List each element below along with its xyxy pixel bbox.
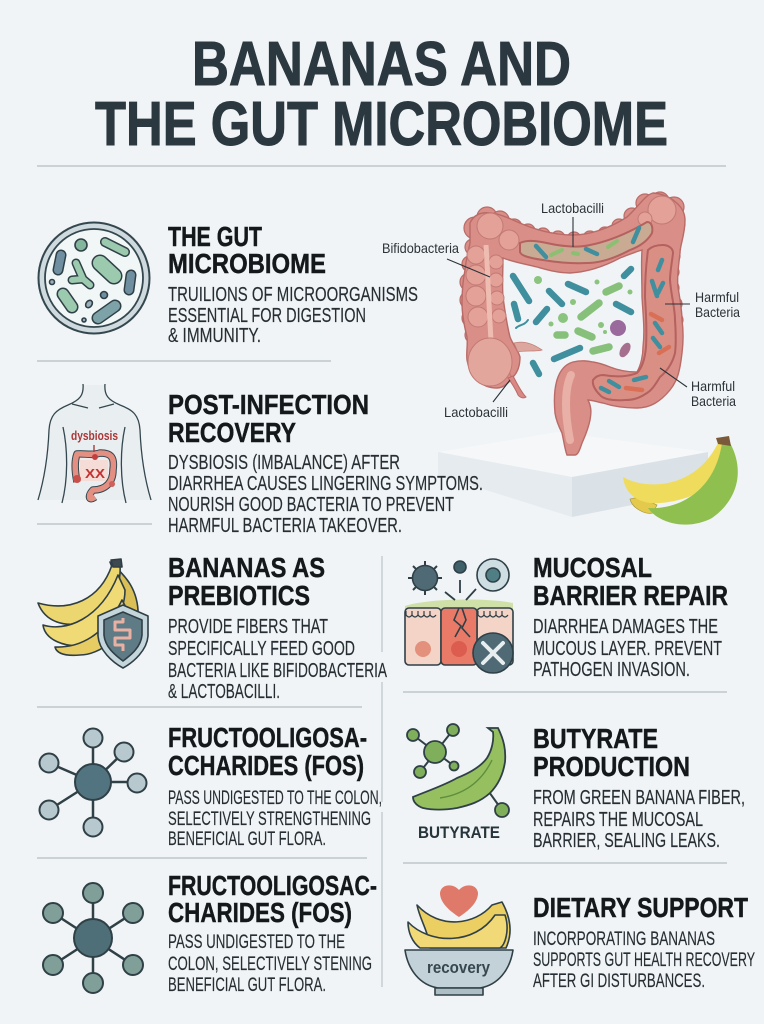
icon: green banana and molecule bbox=[407, 724, 509, 842]
inner haustra segments bbox=[466, 196, 676, 327]
text block: BENEFICIAL GUT FLORA. bbox=[168, 828, 326, 850]
panel: butyrate production bbox=[407, 723, 745, 852]
transverse lumen bbox=[520, 222, 652, 263]
icon: damaged mucosa with wrench bbox=[405, 559, 513, 673]
pedestal bbox=[438, 432, 708, 517]
icon: molecule bbox=[40, 728, 146, 836]
text block: BACTERIA LIKE BIFIDOBACTERIA bbox=[168, 660, 387, 682]
text block: ESSENTIAL FOR DIGESTION bbox=[168, 305, 366, 327]
text block: NOURISH GOOD BACTERIA TO PREVENT bbox=[168, 494, 454, 516]
callout labels: Harmful bbox=[691, 378, 735, 394]
heading bbox=[168, 221, 326, 279]
rectum shading bbox=[566, 375, 571, 440]
panel: bananas as prebiotics bbox=[38, 552, 387, 703]
icon: torso with dysbiosis: dysbiosis bbox=[71, 428, 118, 443]
text block bbox=[533, 928, 755, 992]
text block bbox=[533, 787, 745, 852]
text block: SPECIFICALLY FEED GOOD bbox=[168, 638, 355, 660]
heading: BANANAS AS bbox=[168, 552, 325, 583]
heading bbox=[533, 723, 690, 782]
callout labels bbox=[382, 200, 740, 420]
panel: dietary support bbox=[405, 885, 755, 995]
icon: molecule bbox=[43, 883, 143, 993]
icon: bowl of bananas with heart bbox=[405, 885, 513, 995]
bananas yellow and green bbox=[623, 436, 738, 525]
icon: banana bunch with shield bbox=[38, 559, 148, 668]
heading: MUCOSAL bbox=[533, 552, 652, 583]
icon: torso with dysbiosis bbox=[38, 384, 151, 503]
heading bbox=[168, 552, 325, 611]
text block bbox=[168, 452, 483, 537]
text block: TRUILIONS OF MICROORGANISMS bbox=[168, 284, 418, 306]
icon: green banana and molecule: BUTYRATE bbox=[418, 823, 500, 842]
callout labels: Lactobacilli bbox=[444, 404, 508, 420]
text block: REPAIRS THE MUCOSAL bbox=[533, 809, 703, 831]
text block: PROVIDE FIBERS THAT bbox=[168, 616, 328, 638]
text block bbox=[533, 616, 722, 681]
heading: THE GUT bbox=[168, 221, 262, 252]
heading: FRUCTOOLIGOSA- bbox=[168, 722, 367, 753]
heading: PREBIOTICS bbox=[168, 580, 310, 611]
title bbox=[95, 30, 668, 159]
colon body bbox=[462, 193, 685, 455]
bacteria bbox=[513, 228, 669, 392]
panel: fructooligosaccharides two bbox=[43, 870, 377, 996]
small intestine stub bbox=[514, 342, 542, 352]
text block: PASS UNDIGESTED TO THE bbox=[168, 931, 345, 953]
heading: PRODUCTION bbox=[533, 751, 690, 782]
text block: PATHOGEN INVASION. bbox=[533, 659, 690, 681]
heading: MICROBIOME bbox=[168, 248, 326, 279]
text block: SELECTIVELY STRENGTHENING bbox=[168, 808, 371, 830]
colon bbox=[460, 192, 685, 455]
title: BANANAS AND bbox=[192, 30, 571, 99]
text block: PASS UNDIGESTED TO THE COLON, bbox=[168, 787, 382, 809]
outer haustra bumps bbox=[460, 192, 685, 406]
text block: BENEFICIAL GUT FLORA. bbox=[168, 974, 326, 996]
icon: bowl of bananas with heart: recovery bbox=[427, 958, 490, 977]
ascending colon band bbox=[486, 245, 491, 340]
heading: CCHARIDES (FOS) bbox=[168, 750, 364, 781]
heading: CHARIDES (FOS) bbox=[168, 897, 352, 928]
text block bbox=[168, 931, 372, 996]
descending lumen bbox=[593, 245, 676, 400]
icon: petri dish bbox=[38, 222, 150, 334]
icon: torso with dysbiosis: XX bbox=[85, 466, 105, 481]
text block: HARMFUL BACTERIA TAKEOVER. bbox=[168, 515, 402, 537]
callout labels: Harmful bbox=[695, 289, 739, 305]
callout labels: Bacteria bbox=[695, 304, 740, 320]
heading bbox=[168, 722, 367, 781]
text block bbox=[168, 616, 387, 703]
callout labels: Bifidobacteria bbox=[382, 240, 459, 256]
text block: & IMMUNITY. bbox=[168, 325, 261, 347]
panel: post-infection recovery bbox=[38, 384, 483, 537]
heading: RECOVERY bbox=[168, 417, 296, 448]
panel: fructooligosaccharides one bbox=[40, 722, 382, 850]
callout labels: Bacteria bbox=[691, 393, 736, 409]
cecum bbox=[468, 338, 512, 386]
illustration: colon with bacteria on pedestal bbox=[382, 192, 740, 525]
text block: DIARRHEA CAUSES LINGERING SYMPTOMS. bbox=[168, 473, 483, 495]
panel: the gut microbiome bbox=[38, 221, 418, 347]
heading bbox=[168, 870, 377, 928]
text block bbox=[168, 284, 418, 347]
callout labels: Lactobacilli bbox=[541, 200, 604, 216]
heading bbox=[168, 389, 369, 448]
text block: COLON, SELECTIVELY STENING bbox=[168, 953, 372, 975]
text block: & LACTOBACILLI. bbox=[168, 681, 280, 703]
heading: FRUCTOOLIGOSAC- bbox=[168, 870, 377, 901]
heading bbox=[533, 552, 728, 611]
text block bbox=[168, 787, 382, 850]
text block: DYSBIOSIS (IMBALANCE) AFTER bbox=[168, 452, 400, 474]
heading: BUTYRATE bbox=[533, 723, 658, 754]
heading: POST-INFECTION bbox=[168, 389, 369, 420]
appendix bbox=[508, 376, 526, 398]
panel: mucosal barrier repair bbox=[405, 552, 728, 681]
